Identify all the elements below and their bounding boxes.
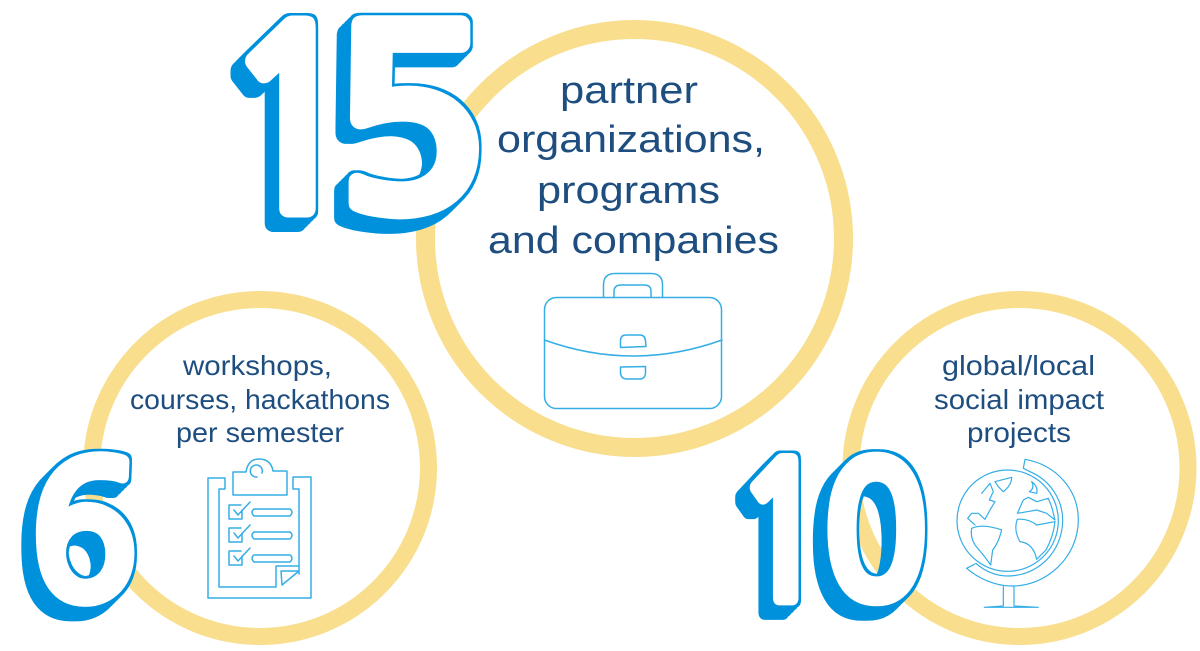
number: 10: 0	[822, 443, 929, 629]
circle: social impact projects	[851, 300, 1188, 636]
heading: workshops	[130, 350, 390, 448]
heading: workshops: per semester	[176, 417, 344, 448]
icon: globe	[957, 459, 1078, 607]
number: 10	[733, 443, 929, 629]
heading: social impact projects: projects	[967, 417, 1071, 448]
icon: briefcase	[544, 274, 722, 408]
heading: partner organizations: partner	[560, 70, 698, 112]
heading: partner organizations: and companies	[488, 220, 779, 262]
number: 6: 6	[29, 442, 139, 628]
heading: workshops: courses, hackathons	[130, 384, 390, 415]
circle: workshops	[92, 300, 428, 636]
icon: clipboard checklist	[208, 459, 311, 598]
heading: social impact projects: global/local	[942, 350, 1095, 381]
number: 10: 1	[733, 443, 831, 629]
heading: social impact projects: social impact	[934, 384, 1104, 415]
number: 15: 5	[329, 1, 490, 249]
heading: partner organizations: organizations,	[497, 119, 765, 161]
number: 15	[220, 1, 490, 249]
heading: social impact projects	[934, 350, 1104, 448]
heading: workshops: workshops,	[182, 350, 332, 381]
heading: partner organizations	[488, 70, 779, 262]
circle: partner organizations	[426, 30, 844, 448]
heading: partner organizations: programs	[537, 170, 720, 212]
number: 15: 1	[220, 1, 364, 249]
